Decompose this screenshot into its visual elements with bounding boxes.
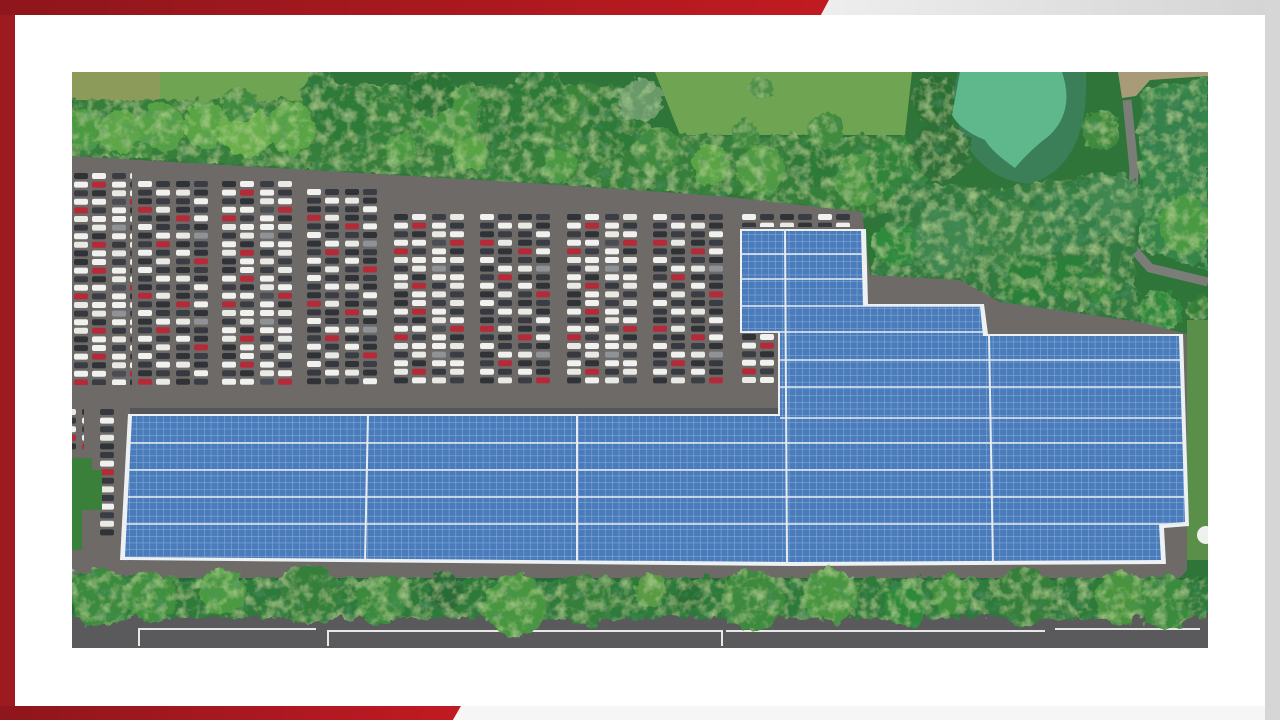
parking row top right [742, 214, 850, 227]
white dome [1197, 526, 1208, 544]
parking row above roof [130, 408, 780, 414]
solar roof [120, 229, 1190, 566]
left garden strip [72, 458, 102, 550]
verge: right side [1187, 320, 1208, 560]
roof module gutters [120, 254, 1190, 524]
forest: far right [1138, 76, 1213, 268]
parking block 1 [136, 180, 212, 385]
access road: far right [1127, 100, 1208, 282]
parking block 3 [305, 188, 381, 386]
road markings [139, 629, 1200, 646]
tree line: bottom [70, 565, 1214, 636]
forest: right [870, 110, 1142, 322]
parking block 0 [74, 173, 132, 385]
parking block: lower left [72, 409, 114, 536]
parking block 6 [565, 213, 641, 386]
parking block 5 [478, 213, 554, 386]
road verge behind trees [72, 578, 1208, 614]
car park asphalt [72, 156, 1187, 578]
parking block 4 [392, 213, 468, 386]
grass clearing [72, 72, 160, 101]
aerial photo: solar car park [56, 64, 1215, 648]
pond [952, 72, 1086, 184]
parking block: by roof [742, 334, 774, 383]
bare earth patch [1118, 72, 1208, 98]
parking block 7 [651, 213, 727, 386]
lower road [72, 612, 1208, 648]
meadow [160, 72, 912, 135]
parking block 2 [220, 180, 296, 385]
round tree by road [1139, 291, 1210, 333]
tree line: top [65, 64, 959, 215]
ground: vegetation base [72, 72, 1208, 578]
